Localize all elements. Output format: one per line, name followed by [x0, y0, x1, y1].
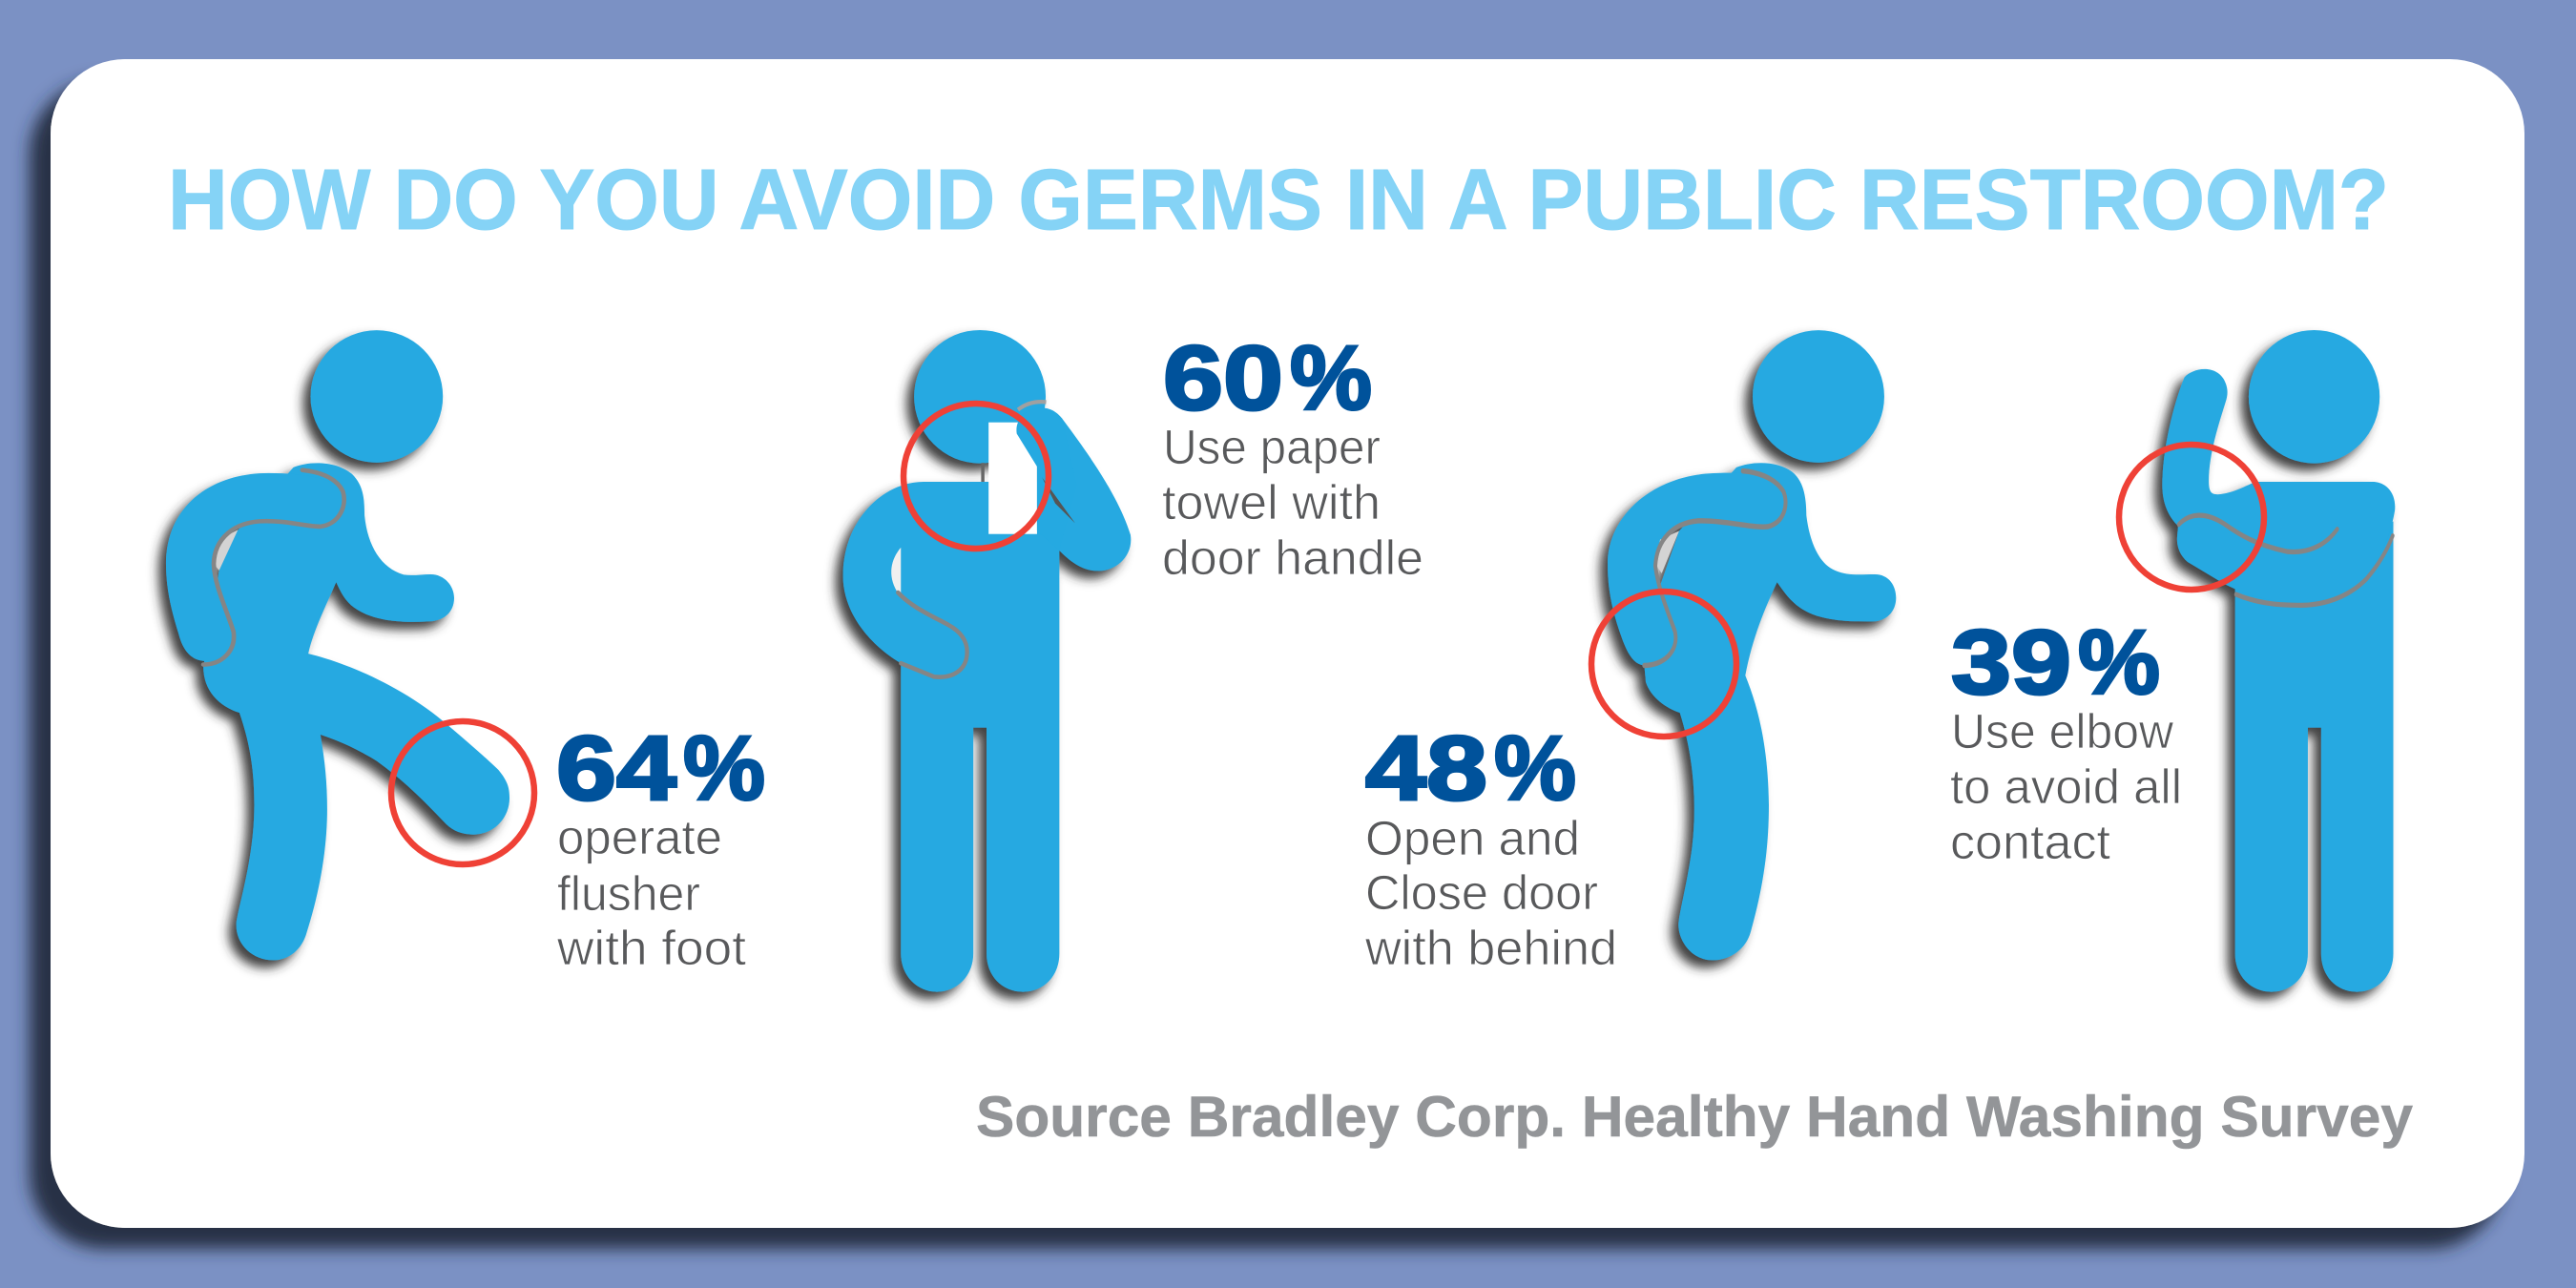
- stat: 64%: %: [683, 717, 765, 820]
- stat: 60%: towel with: [1162, 475, 1381, 530]
- stat: 48%: Close door: [1365, 865, 1598, 920]
- stat: 39%: contact: [1950, 815, 2110, 869]
- stat: 48%: %: [1494, 717, 1576, 820]
- stat: 64%: operate: [557, 810, 722, 864]
- stat: 60%: Use paper: [1163, 420, 1381, 474]
- stat: 60%: %: [1290, 327, 1372, 429]
- stat: 39%: to avoid all: [1950, 759, 2182, 814]
- stat: 48%: with behind: [1364, 921, 1617, 975]
- stat: 39%: Use elbow: [1951, 704, 2173, 758]
- stat: 64%: [556, 717, 765, 975]
- stat: 39%: %: [2078, 612, 2160, 714]
- stat: 64%: flusher: [557, 866, 700, 921]
- stat: 64%: with foot: [556, 921, 746, 975]
- stat: 39%: [1950, 612, 2182, 869]
- stat: 64%: 64: [556, 717, 676, 820]
- stat: 48%: 48: [1365, 717, 1487, 820]
- figure 4: person using elbow: [2119, 330, 2395, 992]
- stat: 39%: 39: [1951, 612, 2071, 714]
- stat: 48%: Open and: [1365, 811, 1580, 865]
- figure 1: person flushing with foot: [166, 330, 534, 961]
- stat: 60%: door handle: [1162, 530, 1423, 585]
- source note: Source Bradley Corp. Healthy Hand Washing Survey: [976, 1085, 2414, 1149]
- figure 2: person using paper towel on door handle: [843, 330, 1131, 992]
- figure 3: person opening door with behind: [1591, 330, 1896, 961]
- stat: 48%: [1364, 717, 1617, 975]
- stat: 60%: [1162, 327, 1423, 585]
- stat: 60%: 60: [1163, 327, 1283, 429]
- title: HOW DO YOU AVOID GERMS IN A PUBLIC RESTROOM?: [168, 153, 2389, 248]
